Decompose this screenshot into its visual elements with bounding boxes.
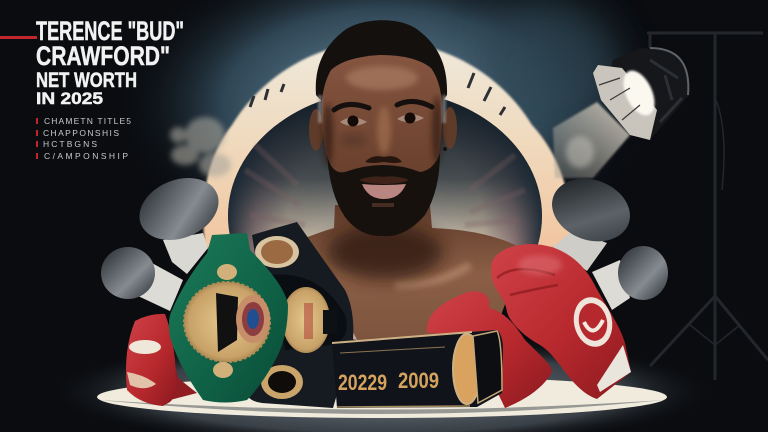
bottom stud: [213, 362, 233, 378]
collarbone shading: [395, 265, 470, 285]
right boxing gloves grey: [543, 168, 668, 310]
face side shadows: [323, 96, 442, 167]
belt years: [338, 368, 439, 395]
spotlight beam: [553, 102, 630, 178]
lips: [359, 176, 409, 184]
forehead highlight: [346, 66, 418, 90]
ears: [309, 107, 457, 151]
large red glove back: [427, 291, 552, 408]
beard: [327, 153, 440, 236]
belt years: 2009: [398, 368, 439, 393]
glove cuff: [597, 345, 631, 392]
left boxing gloves grey: [101, 167, 228, 311]
stage glow: [42, 334, 722, 432]
bottom ring: [261, 365, 303, 399]
studio light stand: [647, 33, 768, 380]
eyebrows: [334, 101, 432, 110]
hair: [316, 20, 447, 105]
front black belt with years: [332, 330, 503, 408]
ring ticks: [250, 73, 505, 115]
spotlight: [593, 48, 689, 140]
black panel: [216, 293, 238, 352]
glove thumb folds: [497, 269, 558, 295]
title text: TERENCE "BUD": [36, 16, 184, 46]
title text: CRAWFORD": [36, 41, 170, 71]
center gold plate: [282, 287, 330, 353]
sun rays: [245, 145, 525, 225]
eyes: [340, 112, 424, 126]
green title belt: [169, 233, 288, 402]
bullet markers: [36, 118, 38, 159]
nose highlight: [377, 106, 391, 154]
inner disc: [228, 90, 542, 342]
title text: NET WORTH: [36, 69, 137, 92]
neck shadow: [327, 224, 443, 280]
beam dust: [566, 136, 594, 168]
small red glove: [126, 314, 197, 406]
side grey fade: [318, 95, 446, 123]
boxer: [300, 20, 525, 345]
top stud: [217, 264, 237, 280]
earring: [443, 147, 447, 151]
face: [322, 55, 442, 225]
bullet list: CHAMETN TITLE5: [44, 116, 131, 126]
large red glove front: [491, 244, 631, 399]
shoulders and chest: [300, 205, 525, 345]
belt end panel: [473, 331, 502, 403]
bullet list: C/AMPONSHIP: [44, 151, 128, 161]
chin patch: [372, 203, 394, 207]
black championship belt: [246, 222, 353, 408]
medallion: [236, 295, 270, 343]
belt inner panel: [270, 274, 347, 350]
title text: IN 2025: [36, 89, 103, 108]
stage platform: [97, 376, 667, 418]
gold plate: [184, 282, 270, 362]
sunburst ring: [170, 41, 572, 342]
title text: [36, 16, 184, 108]
belt gold oval: [453, 334, 481, 404]
title block: [0, 16, 184, 161]
bullet list: [43, 116, 131, 161]
belt years: 20229: [338, 370, 387, 395]
glove logo: [569, 294, 617, 350]
bullet list: CHAPPONSHIS: [43, 128, 119, 138]
red accent line: [0, 36, 37, 39]
top medal: [255, 236, 299, 268]
nose: [365, 156, 402, 163]
dust clouds: [170, 117, 231, 177]
bullet list: HCTBGNS: [43, 139, 97, 149]
